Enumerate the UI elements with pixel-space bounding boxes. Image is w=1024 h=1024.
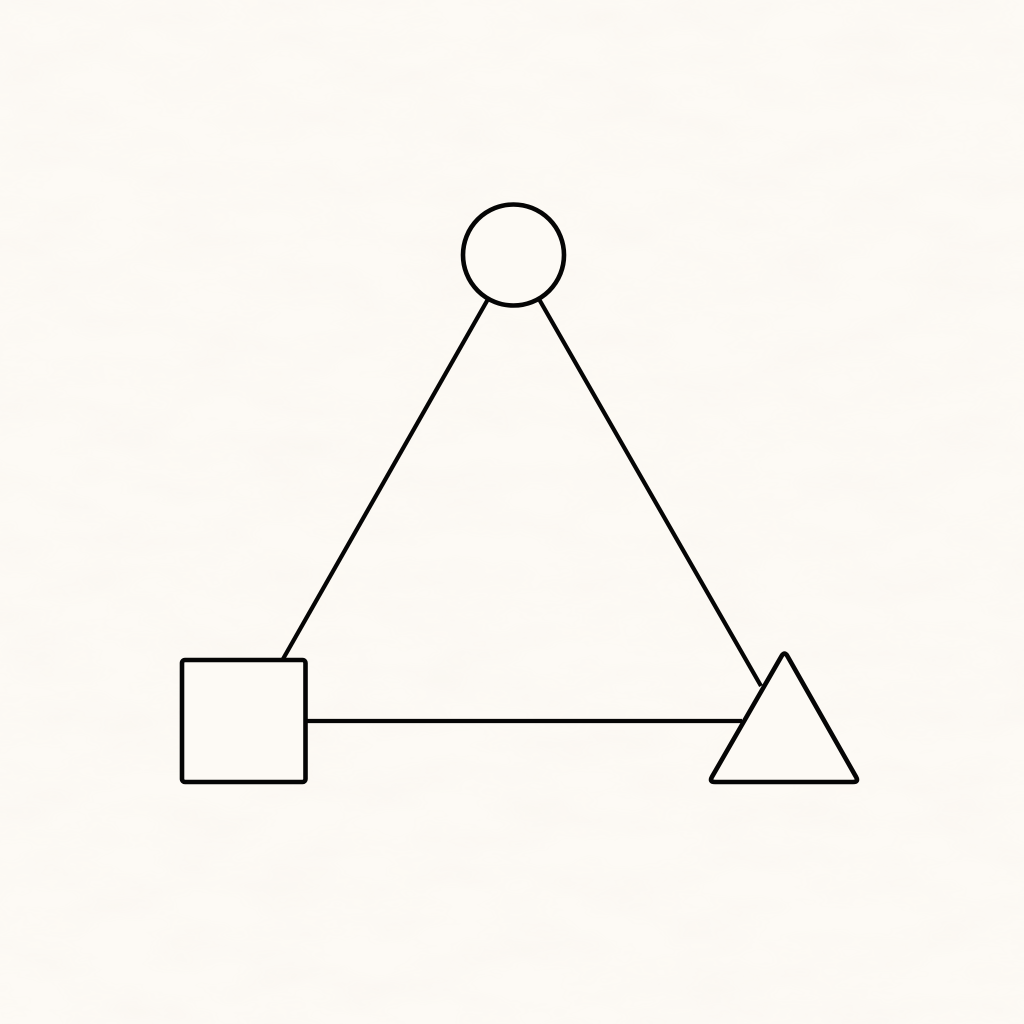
node: triangle: [711, 654, 857, 782]
node: square: [182, 660, 306, 782]
connector: circle to square: [283, 300, 488, 659]
node: circle: [463, 204, 564, 306]
diagram: triangle of connected shapes: [182, 204, 857, 782]
connector: circle to triangle: [540, 300, 761, 686]
connector: square to triangle: [306, 719, 742, 723]
